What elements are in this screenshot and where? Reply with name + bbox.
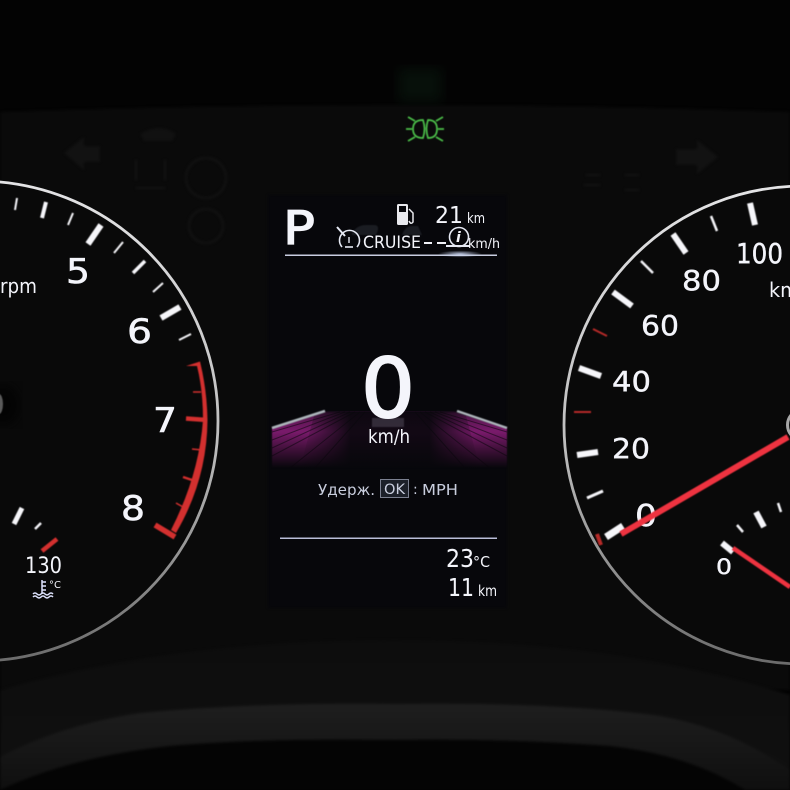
numerals: 0 xyxy=(635,499,657,534)
gauge ring xyxy=(564,186,790,664)
trip distance: 11 xyxy=(448,573,474,602)
cruise status: CRUISE xyxy=(363,233,421,253)
coolant scale value: 130 xyxy=(25,554,62,579)
numerals: 0 xyxy=(716,555,732,579)
trip distance xyxy=(448,573,497,602)
red minor ticks xyxy=(574,329,607,545)
red zone xyxy=(42,362,208,551)
unit label: rpm xyxy=(0,274,37,298)
current speed unit: km/h xyxy=(368,426,410,448)
icon: coolant temperature xyxy=(33,580,61,598)
bottom divider xyxy=(280,538,497,539)
current speed: 0 xyxy=(361,342,415,437)
icon: cruise speedometer xyxy=(337,227,360,247)
tick marks xyxy=(577,203,781,552)
range value: 21 xyxy=(435,203,463,229)
icon: info circle: i xyxy=(456,230,461,246)
ghost warning icons xyxy=(43,128,718,448)
icon: headlight indicator xyxy=(406,117,444,141)
unit switch hint: : xyxy=(413,482,418,498)
cruise dashes xyxy=(424,242,446,244)
icon: info circle xyxy=(446,228,470,246)
hub xyxy=(788,410,790,440)
speed needle xyxy=(621,437,788,534)
numerals xyxy=(66,252,177,529)
central LCD display xyxy=(268,195,507,608)
tick marks xyxy=(14,198,191,529)
numerals: 8 xyxy=(121,489,145,529)
top divider xyxy=(285,250,497,258)
outside temperature: 23 xyxy=(446,544,474,573)
central LCD display: km xyxy=(467,211,485,227)
icon: coolant temperature: °C xyxy=(49,580,61,591)
fuel needle xyxy=(733,548,790,587)
icon: fuel pump xyxy=(397,204,413,225)
gauge ring xyxy=(0,181,218,661)
numerals: 80 xyxy=(682,264,721,297)
numerals: 7 xyxy=(153,401,177,441)
numerals: 6 xyxy=(127,312,152,352)
bottom brim of the instrument cluster xyxy=(0,640,790,790)
numerals: 5 xyxy=(66,252,90,292)
numerals: 60 xyxy=(641,309,679,342)
unit switch hint: MPH xyxy=(422,481,458,499)
trip distance: km xyxy=(478,582,497,600)
numerals: 40 xyxy=(612,365,651,398)
hub xyxy=(0,385,19,425)
unit switch hint xyxy=(318,480,458,499)
gear indicator: P xyxy=(283,201,315,255)
faint car icons xyxy=(352,225,422,235)
numerals xyxy=(612,237,783,579)
unit switch hint: OK xyxy=(384,482,406,498)
numerals: 20 xyxy=(612,432,650,465)
left gauge: tachometer xyxy=(0,181,218,661)
outside temperature: °C xyxy=(473,553,490,571)
right gauge: speedometer xyxy=(564,186,790,664)
speed unit: km/h xyxy=(468,237,500,252)
road graphic xyxy=(272,411,507,468)
unit switch hint: Удерж. xyxy=(318,481,375,499)
numerals: 100 xyxy=(736,237,783,270)
